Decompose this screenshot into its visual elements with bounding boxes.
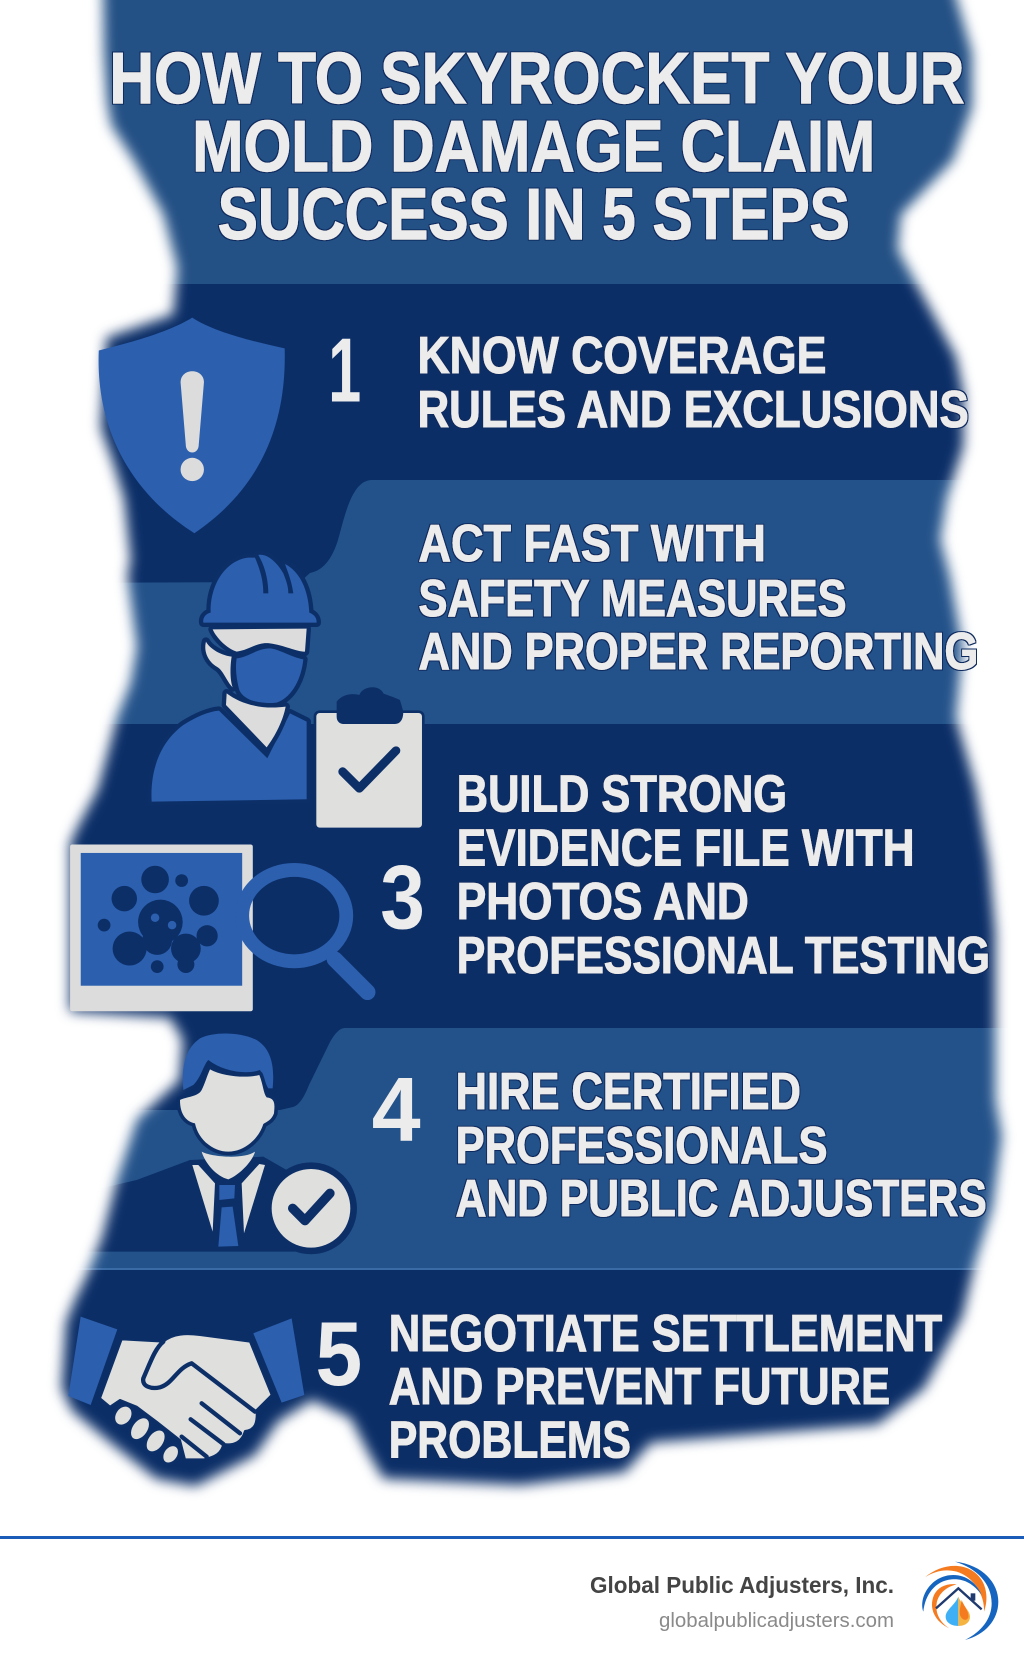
step 3 text: PHOTOS AND [457,873,749,931]
step 3 number: 3 [380,846,425,948]
footer company name: Global Public Adjusters, Inc. [590,1572,894,1598]
title: MOLD DAMAGE CLAIM [192,107,875,187]
icon: adjuster person with badge [180,1034,357,1254]
icon: magnifying glass [242,870,368,992]
step 3 text: BUILD STRONG [457,766,787,824]
step 5 number: 5 [315,1303,362,1405]
step 4 text [456,1063,987,1228]
footer divider [0,1536,1024,1539]
step 4 number: 4 [372,1059,421,1161]
icon: mold photo [70,844,253,1011]
step 5 text: AND PREVENT FUTURE [389,1358,890,1416]
title: SUCCESS IN 5 STEPS [218,175,850,255]
step 1 number: 1 [328,320,361,422]
icon: clipboard with check [315,687,423,829]
title [109,39,964,255]
icon: handshake [68,1317,304,1468]
step 1 text [417,327,969,439]
footer website: globalpublicadjusters.com [659,1610,894,1632]
step 2 text: ACT FAST WITH [419,515,766,573]
icon: company logo [922,1562,998,1640]
step 5 text: PROBLEMS [389,1411,631,1469]
step 3 text: EVIDENCE FILE WITH [457,820,915,878]
icon: worker with hard hat and mask [151,555,317,802]
icon: shield with exclamation [99,318,285,533]
step 3 text [457,766,990,985]
step 5 text [389,1305,942,1469]
step 4 text: PROFESSIONALS [456,1117,827,1175]
step 4 text: HIRE CERTIFIED [456,1063,801,1121]
step 2 text [419,515,978,681]
step 2 text: SAFETY MEASURES [419,570,847,628]
step 1 text: KNOW COVERAGE [417,327,826,385]
